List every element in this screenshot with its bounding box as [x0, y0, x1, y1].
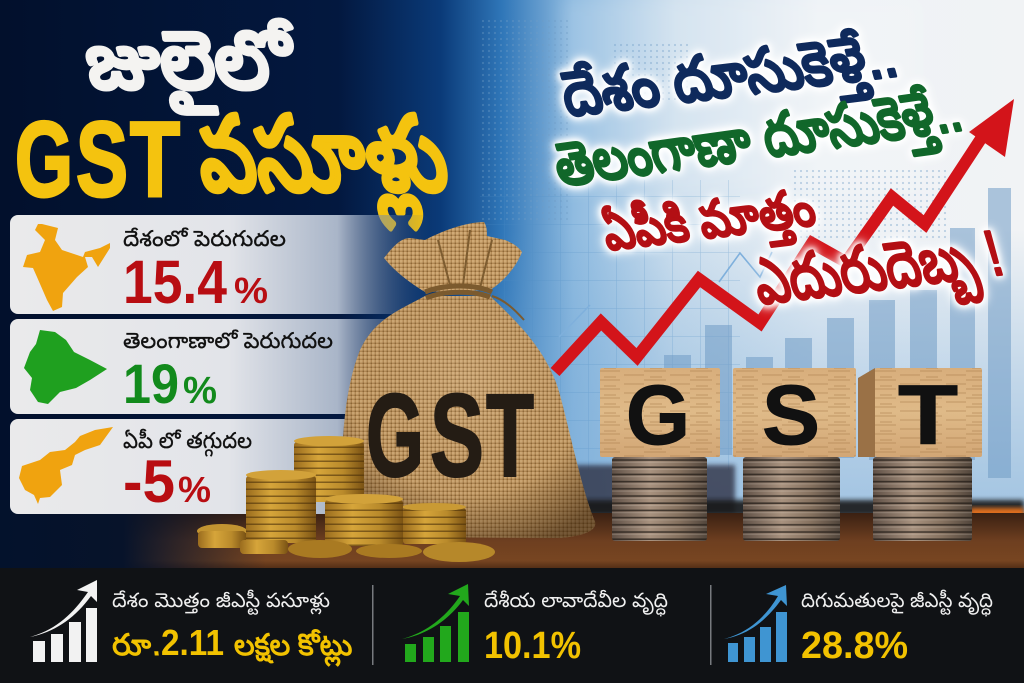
icon: blue growth chart — [724, 585, 787, 662]
line: country: దేశం దూసుకెళ్తే.. — [553, 22, 906, 135]
stat: domestic transactions — [402, 584, 668, 667]
icon: India map — [23, 224, 110, 311]
title line two: collections: వసూళ్లు — [188, 97, 457, 229]
India value: % — [234, 270, 268, 311]
import label: దిగుమతులపై జీఎస్టీ వృద్ధి — [801, 589, 993, 617]
wooden block: T: T — [898, 368, 958, 462]
bag lettering — [366, 370, 534, 502]
background bar chart — [664, 188, 1011, 478]
icon: AP map — [19, 427, 113, 504]
headline: national surge — [545, 22, 1013, 328]
bag top ruffle — [384, 222, 522, 292]
money bag — [342, 222, 595, 538]
icon: green growth chart — [402, 584, 469, 662]
stat: import growth — [724, 585, 993, 667]
import value: 28.8% — [801, 625, 908, 667]
bag lettering: S — [430, 370, 484, 502]
panel: India — [10, 215, 430, 316]
title line two: GST: S — [76, 99, 128, 219]
bag body — [342, 296, 595, 538]
AP label: ఏపీ లో తగ్గుదల — [123, 428, 252, 457]
AP value — [123, 448, 211, 515]
domestic label: దేశీయ లావాదేవీల వృద్ధి — [484, 590, 668, 617]
title line two: GST — [15, 99, 180, 219]
silver coin stack: G — [612, 457, 707, 541]
panel: Telangana — [10, 319, 430, 415]
wooden table — [0, 465, 1024, 569]
bottom band — [0, 568, 1024, 683]
silver coin stack: T — [873, 457, 972, 541]
title line two: GST: T — [130, 99, 180, 219]
total value: లక్షల కోట్లు — [232, 629, 354, 667]
total value: 2.11 — [161, 622, 224, 663]
AP value: -5 — [123, 448, 175, 515]
title line two: GST: G — [15, 99, 73, 219]
wooden block: S — [733, 368, 856, 462]
wooden block: G — [600, 368, 720, 462]
bag rope — [425, 286, 492, 298]
red rising arrow — [555, 99, 1014, 372]
Telangana label: తెలంగాణాలో పెరుగుదల — [123, 328, 333, 353]
Telangana value — [123, 352, 217, 415]
total label: దేశం మొత్తం జీఎస్టీ పసూళ్లు — [112, 589, 330, 615]
line: AP: ఏపీకి మాత్తం — [595, 180, 823, 266]
AP value: % — [178, 469, 211, 510]
headline: main title — [15, 16, 457, 229]
icon: white growth chart — [30, 580, 97, 662]
title line one: జులైలో — [79, 16, 306, 114]
wooden block: G: G — [626, 368, 690, 462]
total value — [110, 622, 354, 667]
stat: total collections — [30, 580, 354, 667]
Telangana value: % — [183, 370, 217, 412]
India value: 15.4 — [123, 248, 227, 316]
total value: రూ. — [110, 629, 162, 662]
wooden block: T — [858, 368, 982, 462]
Telangana value: 19 — [123, 352, 179, 415]
icon: Telangana map — [24, 330, 107, 404]
bag lettering: T — [486, 370, 534, 502]
wooden block: S: S — [762, 368, 820, 462]
India label: దేశంలో పెరుగుదల — [123, 226, 286, 251]
gold coin stacks — [197, 436, 495, 562]
silver coin stack: S — [743, 457, 840, 541]
background small blue arrows — [559, 252, 772, 337]
bag lettering: G — [366, 370, 424, 502]
panel: Andhra Pradesh — [10, 419, 430, 515]
domestic value: 10.1% — [484, 625, 581, 667]
